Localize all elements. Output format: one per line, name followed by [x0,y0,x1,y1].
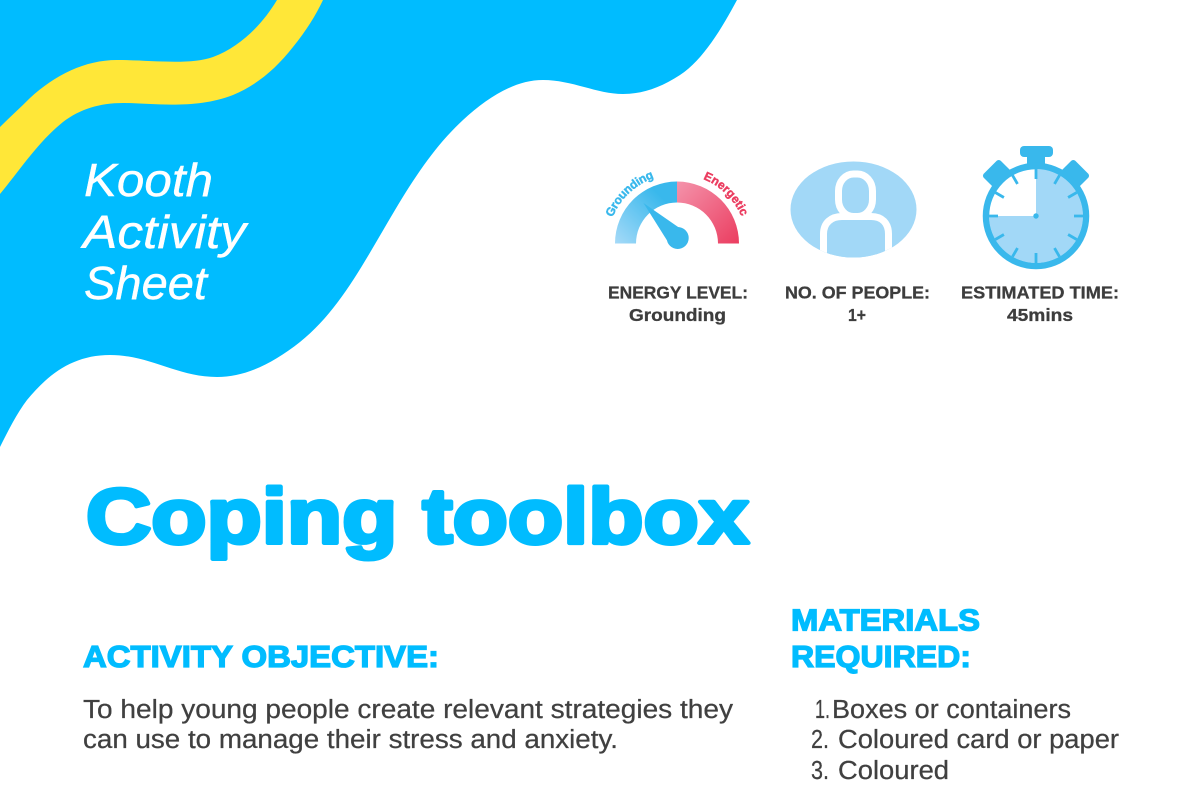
heading: materials required [791,604,980,674]
icon: energy gauge: Energetic [704,172,747,216]
materials list: 1. [815,696,830,724]
objective text: To help young people create relevant strategies they [83,696,733,724]
energy level label: Grounding [629,305,726,325]
materials list: Coloured card or paper [838,726,1120,754]
materials list: 2. [811,726,829,754]
number of people label [785,282,930,325]
heading: materials required: MATERIALS [791,604,980,638]
activity objective panel [83,640,733,754]
icon: energy gauge: Grounding [606,172,654,216]
estimated time label: ESTIMATED TIME: [961,282,1119,302]
materials list: Boxes or containers [832,696,1071,724]
materials list: 3. [811,757,829,785]
materials list [811,696,1120,785]
objective text: can use to manage their stress and anxiety. [83,726,618,754]
objective text [83,696,733,754]
icon: energy gauge [606,172,747,249]
energy level block [606,172,748,325]
heading: activity objective: ACTIVITY OBJECTIVE: [83,640,439,674]
number of people block [785,162,930,325]
title: Coping toolbox: Coping toolbox [86,472,749,560]
estimated time block [961,146,1119,325]
yellow ribbon [0,0,323,194]
header blue wave [0,0,737,447]
number of people label: NO. OF PEOPLE: [785,282,930,302]
icon: stopwatch [982,146,1090,266]
heading: materials required: REQUIRED: [791,640,971,674]
subtitle: Kooth Activity Sheet: Kooth [84,154,213,206]
energy level label [608,282,748,325]
number of people label: 1+ [848,305,866,325]
subtitle: Kooth Activity Sheet: Sheet [84,257,209,309]
materials list: Coloured [838,757,949,785]
subtitle: Kooth Activity Sheet: Activity [80,206,249,258]
estimated time label: 45mins [1007,305,1073,325]
icon: person [790,162,916,262]
subtitle: Kooth Activity Sheet [80,154,249,309]
materials required panel [791,604,1120,785]
estimated time label [961,282,1119,325]
energy level label: ENERGY LEVEL: [608,282,748,302]
